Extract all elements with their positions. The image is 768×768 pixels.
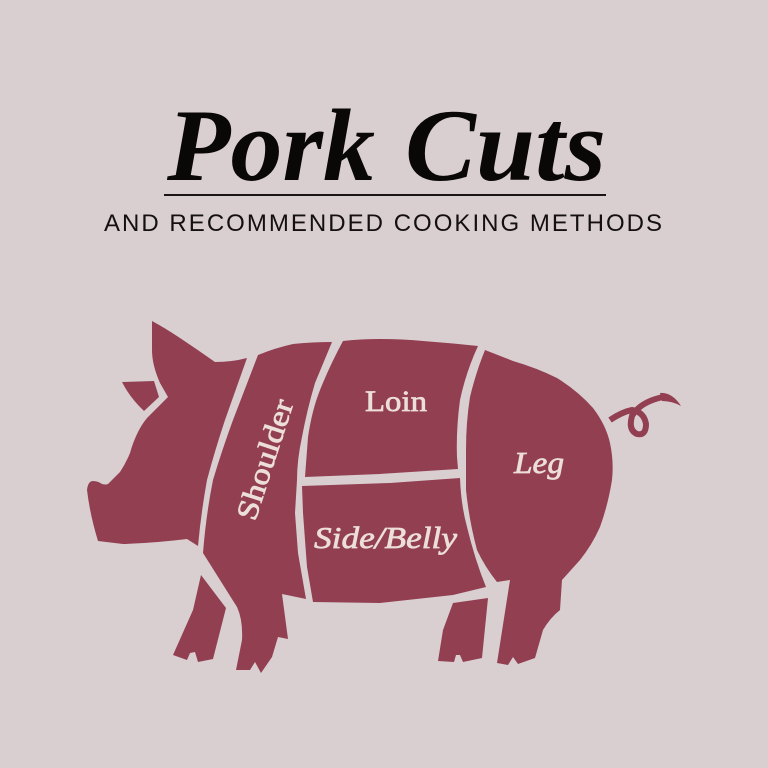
subtitle: AND RECOMMENDED COOKING METHODS	[104, 210, 662, 237]
pig diagram	[87, 321, 681, 673]
far hind leg	[438, 598, 488, 662]
label: loin: Loin	[365, 385, 427, 418]
curly tail	[610, 397, 663, 434]
label: leg: Leg	[513, 445, 564, 480]
shoulder cut	[203, 342, 332, 673]
label: shoulder: Shoulder	[230, 395, 300, 524]
title	[166, 89, 606, 203]
pig head	[87, 321, 247, 546]
back ear	[122, 381, 159, 411]
label: side/belly: Side/Belly	[314, 520, 457, 555]
title: Cuts	[405, 89, 606, 203]
loin cut	[305, 339, 478, 477]
title: Pork	[166, 89, 375, 203]
side/belly cut	[302, 478, 486, 603]
leg cut	[466, 350, 613, 665]
far front leg	[173, 575, 226, 662]
title underline	[164, 194, 606, 196]
tail tip	[660, 393, 681, 406]
